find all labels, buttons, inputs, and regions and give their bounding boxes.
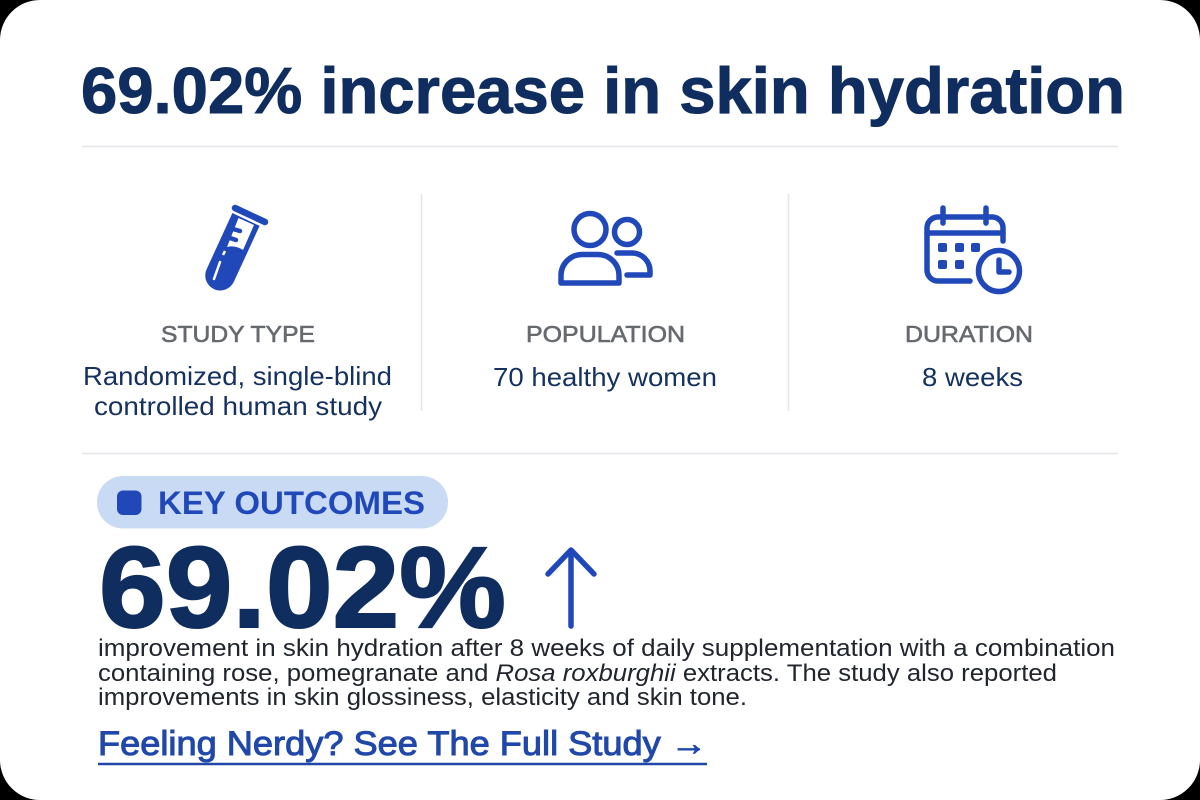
icon: two people: [561, 214, 650, 283]
badge: key outcomes: [97, 476, 448, 528]
text: study type value: controlled human study: [94, 391, 382, 421]
text: study type value: [83, 361, 392, 421]
description text: containing rose, pomegranate and Rosa roxburghii extracts. The study also reported: [98, 660, 1057, 687]
label: study type: STUDY TYPE: [161, 321, 315, 347]
icon: calendar with clock: [927, 208, 1020, 292]
panel: study type: [83, 208, 392, 421]
text: population value: 70 healthy women: [493, 362, 717, 392]
label: duration: DURATION: [905, 321, 1033, 347]
link: full study: Feeling Nerdy? See The Full Study →: [98, 725, 707, 763]
description text: improvements in skin glossiness, elasticity and skin tone.: [98, 684, 747, 711]
panel: duration: [905, 208, 1033, 392]
panel: population: [493, 214, 717, 392]
big stat: 69.02%: [99, 524, 506, 652]
panel: key outcomes: [97, 476, 1115, 764]
text: study type value: Randomized, single-blind: [83, 361, 392, 391]
arrow: up: [548, 550, 594, 626]
title: 69.02% increase in skin hydration: [81, 54, 1125, 127]
description text: [98, 635, 1115, 711]
badge: key outcomes: KEY OUTCOMES: [158, 485, 425, 521]
description text: improvement in skin hydration after 8 weeks of daily supplementation with a combination: [98, 635, 1115, 662]
label: population: POPULATION: [526, 321, 685, 347]
text: duration value: 8 weeks: [922, 362, 1023, 392]
icon: test tube: [205, 208, 265, 290]
